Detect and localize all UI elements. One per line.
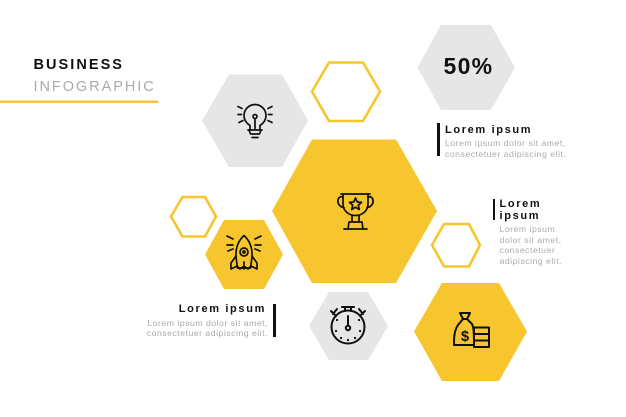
body [147, 318, 268, 338]
hexagon: stopwatch [309, 292, 388, 360]
icon: rocket [227, 236, 261, 269]
rule [273, 304, 276, 337]
hexagon: 50 percent [418, 25, 515, 110]
hexagon outline: left [171, 197, 216, 236]
body: consectetuer adipiscing elit. [445, 148, 566, 158]
body: Lorem ipsum [500, 224, 555, 234]
body: Lorem ipsum dolor sit amet, [147, 318, 268, 328]
icon: light bulb [238, 104, 272, 138]
hexagon outline: top [312, 62, 380, 121]
text block: right [493, 198, 562, 266]
hexagon: trophy [272, 140, 437, 283]
body: consectetuer adipiscing elit. [147, 328, 268, 338]
hexagon: money [414, 283, 527, 381]
stat: 50%: 50% [444, 53, 493, 79]
hexagon: rocket [205, 220, 283, 289]
body: Lorem ipsum dolor sit amet, [445, 138, 566, 148]
icon: stopwatch [331, 307, 365, 344]
rule [492, 199, 495, 220]
heading: ipsum [500, 210, 540, 222]
hexagon: light bulb [202, 74, 308, 167]
heading: Lorem ipsum [445, 124, 532, 136]
body: dolor sit amet, [500, 234, 562, 244]
body: consectetuer [500, 245, 555, 255]
body: adipiscing elit. [500, 256, 562, 266]
subtitle: infographic: INFOGRAPHIC [34, 79, 156, 95]
body [445, 138, 566, 158]
text block: bottom left [147, 303, 276, 338]
hexagon outline: right [432, 224, 480, 266]
text block: top right [437, 123, 566, 158]
rule [437, 123, 440, 156]
icon: trophy [338, 194, 373, 229]
title: business: BUSINESS [34, 57, 124, 73]
icon: money bag [454, 313, 489, 347]
heading [500, 198, 541, 222]
heading: Lorem [500, 198, 541, 210]
icon: dollar sign: $ [461, 329, 469, 345]
heading: Lorem ipsum [179, 303, 266, 315]
body [500, 224, 562, 266]
title underline [0, 100, 158, 103]
